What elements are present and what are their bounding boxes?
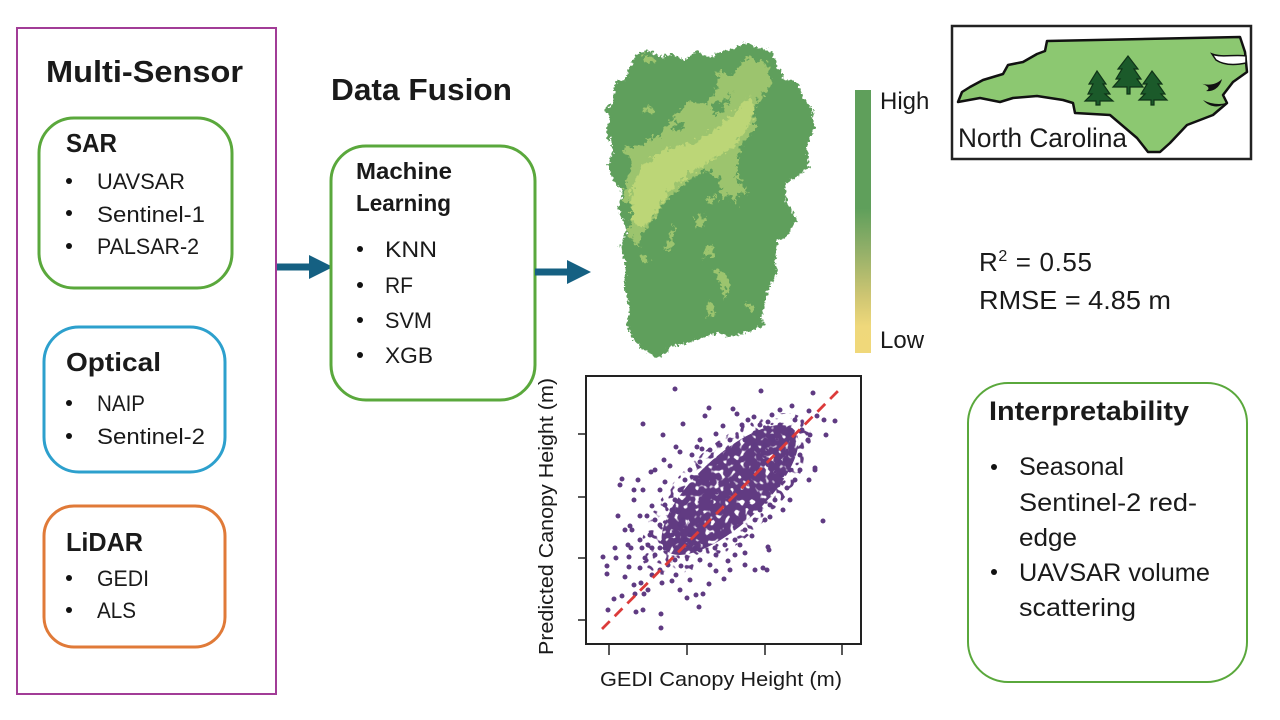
- legend: canopy height colour bar: High: [880, 88, 929, 115]
- metrics: accuracy: R: [979, 247, 998, 277]
- arrow: machine learning to map: [535, 260, 591, 284]
- card: SAR: Sentinel-1: [97, 202, 205, 227]
- metrics: accuracy: = 0.55: [1008, 247, 1092, 277]
- metrics: accuracy: 2: [998, 248, 1007, 265]
- arrow: sensors to machine learning: [277, 255, 333, 279]
- scatter points: [603, 387, 836, 628]
- panel: interpretability: Seasonal: [1019, 453, 1124, 481]
- card: Optical: Optical: [66, 347, 161, 377]
- card: SAR: [39, 118, 232, 288]
- card: SAR: PALSAR-2: [97, 234, 199, 259]
- panel: machine learning: Learning: [356, 190, 451, 216]
- legend: canopy height colour bar: Low: [880, 327, 925, 354]
- panel: interpretability: edge: [1019, 524, 1077, 552]
- card: Optical: Sentinel-2: [97, 424, 205, 449]
- panel: machine learning: Machine: [356, 158, 452, 184]
- card: SAR: UAVSAR: [97, 169, 185, 194]
- card: LiDAR: LiDAR: [66, 527, 143, 557]
- panel: machine learning: KNN: [385, 237, 437, 262]
- 1:1 reference line: [602, 391, 838, 629]
- panel: interpretability: [968, 383, 1247, 682]
- map: canopy height prediction: [604, 43, 814, 358]
- panel: interpretability: Sentinel-2 red-: [1019, 489, 1197, 517]
- icon: three pine trees: [1085, 56, 1167, 105]
- x axis label: GEDI Canopy Height (m): [600, 669, 842, 691]
- panel: interpretability: UAVSAR volume: [1019, 559, 1210, 587]
- chart: predicted vs GEDI canopy height scatter: [536, 376, 861, 691]
- metrics: accuracy: RMSE = 4.85 m: [979, 285, 1171, 315]
- y axis label: Predicted Canopy Height (m): [536, 378, 558, 655]
- panel: machine learning: RF: [385, 273, 413, 298]
- label: North Carolina: North Carolina: [958, 123, 1128, 153]
- panel: machine learning: [331, 146, 535, 400]
- card: LiDAR: [44, 506, 225, 647]
- legend: canopy height colour bar: [855, 88, 929, 354]
- state shape: [958, 37, 1247, 152]
- heading: Multi-Sensor: Multi-Sensor: [46, 54, 243, 89]
- inset: North Carolina locator: [952, 26, 1251, 159]
- panel: machine learning: SVM: [385, 308, 432, 333]
- sounds and inlets: [1200, 54, 1246, 106]
- card: LiDAR: ALS: [97, 598, 136, 623]
- panel: multi-sensor inputs: [17, 28, 276, 694]
- metrics: accuracy: [979, 247, 1171, 315]
- heading: Data Fusion: Data Fusion: [331, 72, 512, 107]
- card: Optical: NAIP: [97, 391, 145, 416]
- card: Optical: [44, 327, 225, 472]
- card: LiDAR: GEDI: [97, 566, 149, 591]
- panel: interpretability: Interpretability: [989, 396, 1189, 426]
- card: SAR: SAR: [66, 128, 117, 158]
- panel: interpretability: scattering: [1019, 594, 1136, 622]
- axis ticks: [578, 434, 842, 655]
- panel: machine learning: XGB: [385, 343, 433, 368]
